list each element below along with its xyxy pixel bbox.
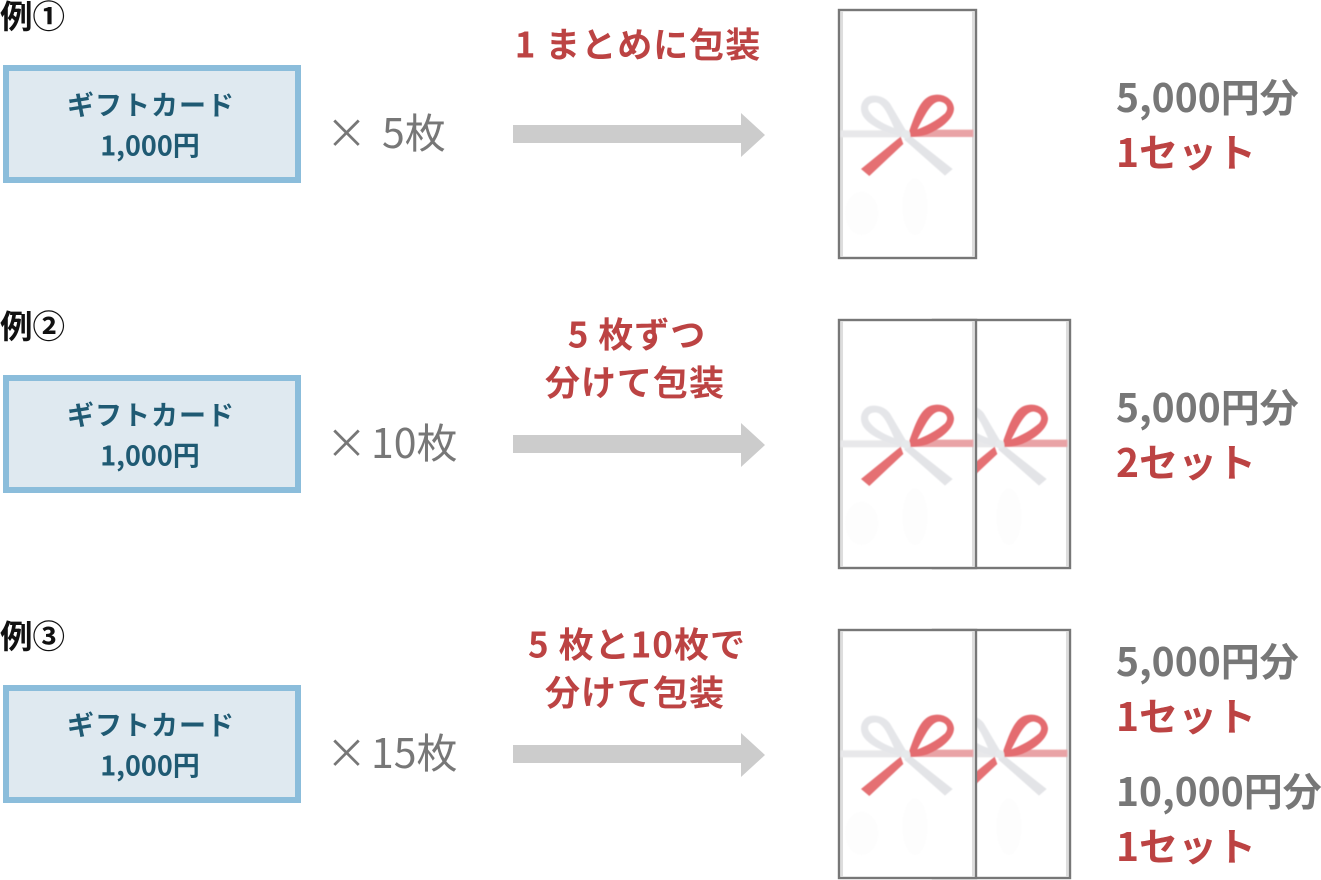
result [1116,378,1299,489]
result: 5,000円分 [1116,378,1299,434]
gift card: 1,000円 [100,124,200,164]
result: 1セット [1116,123,1256,179]
heading: example 2: 例② [0,301,65,348]
quantity: × [326,410,367,470]
results: 1セット [1116,817,1256,873]
arrow [513,113,765,157]
gift envelope [839,10,976,258]
arrow [513,423,765,467]
instruction: 分けて包装 [545,666,725,716]
gift envelopes [839,320,1070,568]
panel: example 2 [0,301,1299,568]
quantity: × [326,720,367,780]
result: 2セット [1116,433,1256,489]
result: 5,000円分 [1116,68,1299,124]
panel: example 1 [0,0,1299,258]
instruction: 1 まとめに包装 [515,18,761,68]
results: 1セット [1116,687,1256,743]
arrow [513,733,765,777]
quantity: × [326,100,367,160]
instruction: 分けて包装 [545,356,725,406]
gift card: ギフトカード [67,704,235,743]
instruction [528,618,746,716]
instruction [545,308,725,406]
heading: example 3: 例③ [0,611,65,658]
results [1116,632,1321,873]
quantity: 15枚 [371,720,458,780]
gift card: ギフトカード [67,394,235,433]
gift card: 1,000円 [100,744,200,784]
panel: example 3 [0,611,1321,878]
gift card: ギフトカード [67,84,235,123]
instruction: 5 枚と10枚で [528,618,746,668]
results: 5,000円分 [1116,632,1299,688]
quantity: 10枚 [371,410,458,470]
instruction: 5 枚ずつ [568,308,706,358]
gift card [6,688,298,800]
results: 10,000円分 [1116,762,1321,818]
gift card: 1,000円 [100,434,200,474]
result [1116,68,1299,179]
quantity: 5枚 [382,100,446,160]
gift envelopes [839,630,1070,878]
gift card [6,68,298,180]
gift card [6,378,298,490]
